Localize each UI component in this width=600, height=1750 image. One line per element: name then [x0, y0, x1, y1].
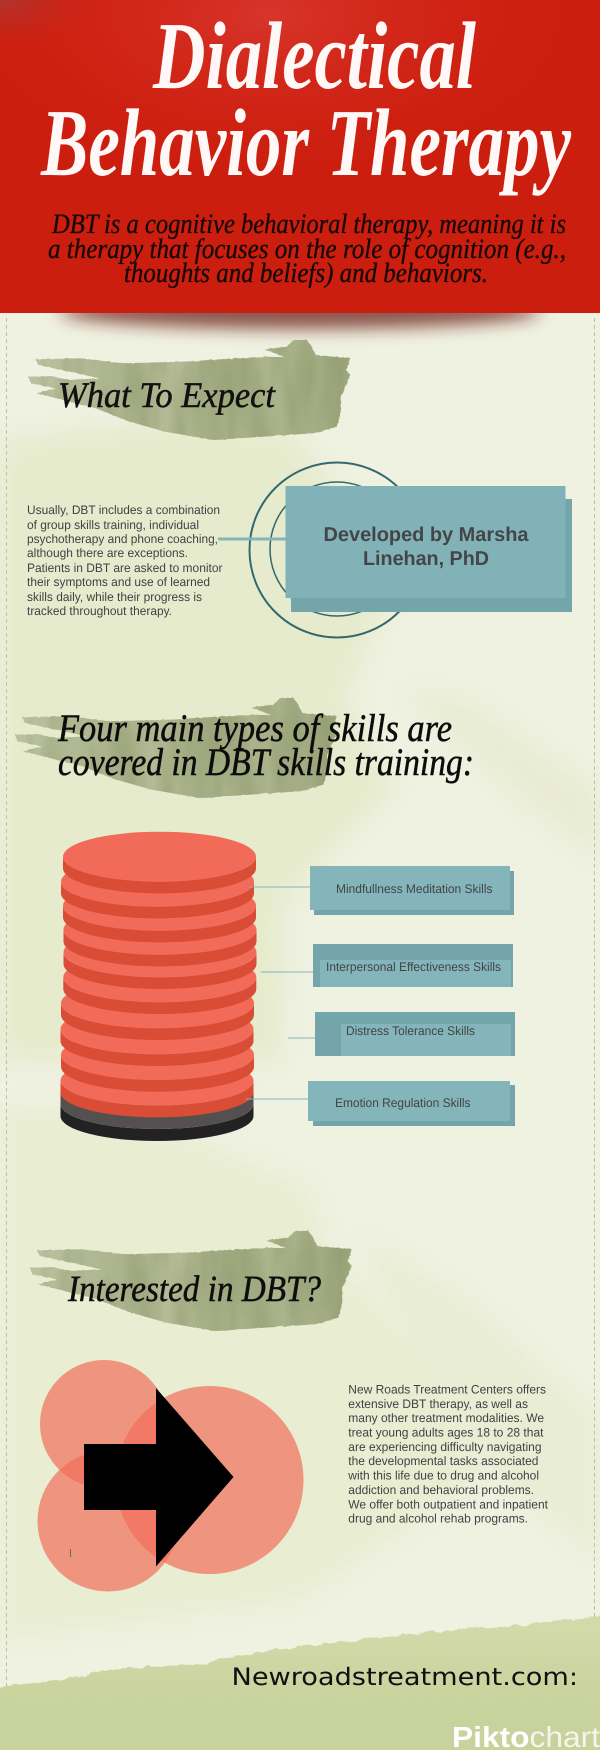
text block: what to expect: [27, 503, 222, 618]
callout text: Developed by Marsha: [324, 524, 529, 546]
label: emotion: Emotion Regulation Skills: [335, 1096, 470, 1110]
disc 9: [61, 1030, 254, 1092]
text block: new roads: treat young adults ages 18 to 28 that: [348, 1426, 544, 1440]
footer band: [0, 1614, 600, 1750]
brush stroke: [30, 1230, 352, 1331]
heading: interested in dbt: Interested in DBT?: [67, 1269, 321, 1310]
text block: new roads: extensive DBT therapy, as well as: [348, 1397, 528, 1411]
heading: four main types: Four main types of skills are: [57, 707, 452, 750]
website text: Newroadstreatment.com:: [232, 1663, 578, 1691]
concentric circles: [250, 462, 424, 638]
disc 3: [63, 881, 256, 942]
base disc: gray: [60, 1085, 254, 1129]
heading: interested in dbt: [30, 1230, 352, 1331]
heading: what to expect: [29, 339, 350, 440]
text block: new roads: [347, 1382, 549, 1526]
header shadow: [60, 295, 540, 329]
intro text: [48, 209, 566, 289]
label: distress: Distress Tolerance Skills: [346, 1024, 475, 1038]
text block: new roads: New Roads Treatment Centers offers: [348, 1382, 546, 1396]
cursor mark: [70, 1549, 71, 1557]
text block: new roads: the developmental tasks associated: [348, 1454, 539, 1468]
text block: what to expect: skills daily, while their progress is: [27, 590, 202, 604]
text block: what to expect: although there are exceptions.: [27, 546, 188, 560]
text block: new roads: addiction and behavioral problems.: [348, 1483, 534, 1497]
arrow icon: [84, 1388, 234, 1566]
circle: right: [116, 1386, 304, 1574]
label: emotion: [246, 1081, 515, 1126]
disc 5: [64, 927, 256, 989]
base disc: black: [60, 1104, 254, 1141]
text block: what to expect: psychotherapy and phone coaching,: [27, 532, 218, 546]
brush stroke: [29, 339, 350, 440]
label: mindfulness: [249, 866, 514, 915]
text block: new roads: are experiencing difficulty navigating: [348, 1440, 542, 1454]
callout text: [324, 524, 529, 570]
text block: new roads: many other treatment modalities. We: [348, 1411, 544, 1425]
brush stroke: [15, 697, 337, 798]
text block: new roads: We offer both outpatient and inpatient: [348, 1497, 549, 1511]
connector line: [218, 538, 286, 540]
label: interpersonal: Interpersonal Effectiveness Skills: [326, 960, 501, 974]
text block: new roads: drug and alcohol rehab programs.: [348, 1512, 528, 1526]
intro text: thoughts and beliefs) and behaviors.: [124, 258, 488, 289]
label: distress: [288, 1012, 515, 1056]
disc 2: [61, 857, 254, 918]
circle: bottom left: [38, 1450, 178, 1592]
text block: what to expect: Usually, DBT includes a combination: [27, 503, 220, 517]
circle: top left: [40, 1360, 168, 1488]
label: interpersonal: [261, 944, 513, 987]
label: mindfulness: Mindfullness Meditation Skills: [336, 882, 492, 896]
disc 4: [64, 905, 256, 966]
text block: what to expect: their symptoms and use of learned: [27, 575, 210, 589]
title: [40, 2, 571, 196]
venn circles with arrow: [38, 1360, 304, 1592]
box: [286, 486, 566, 598]
disc 6: [63, 952, 256, 1014]
box shadow: [291, 499, 572, 612]
text block: new roads: with this life due to drug and alcohol: [347, 1469, 539, 1483]
callout text: Linehan, PhD: [363, 548, 489, 570]
heading: what to expect: What To Expect: [58, 375, 276, 415]
header panel: [0, 0, 600, 313]
text block: what to expect: Patients in DBT are asked to monitor: [27, 561, 222, 575]
heading: four main types: covered in DBT skills training:: [58, 741, 474, 784]
disc 10: [60, 1056, 254, 1117]
heading: four main types: [15, 697, 474, 798]
disc 1: [63, 832, 256, 893]
stacked disc chart: [60, 832, 256, 1141]
disc 7: [61, 978, 254, 1040]
text block: what to expect: of group skills training, individual: [27, 518, 199, 532]
callout: developed by: [218, 462, 572, 638]
text block: what to expect: tracked throughout therapy.: [27, 604, 172, 618]
title: Dialectical: [152, 2, 476, 109]
disc 8: [60, 1004, 254, 1066]
